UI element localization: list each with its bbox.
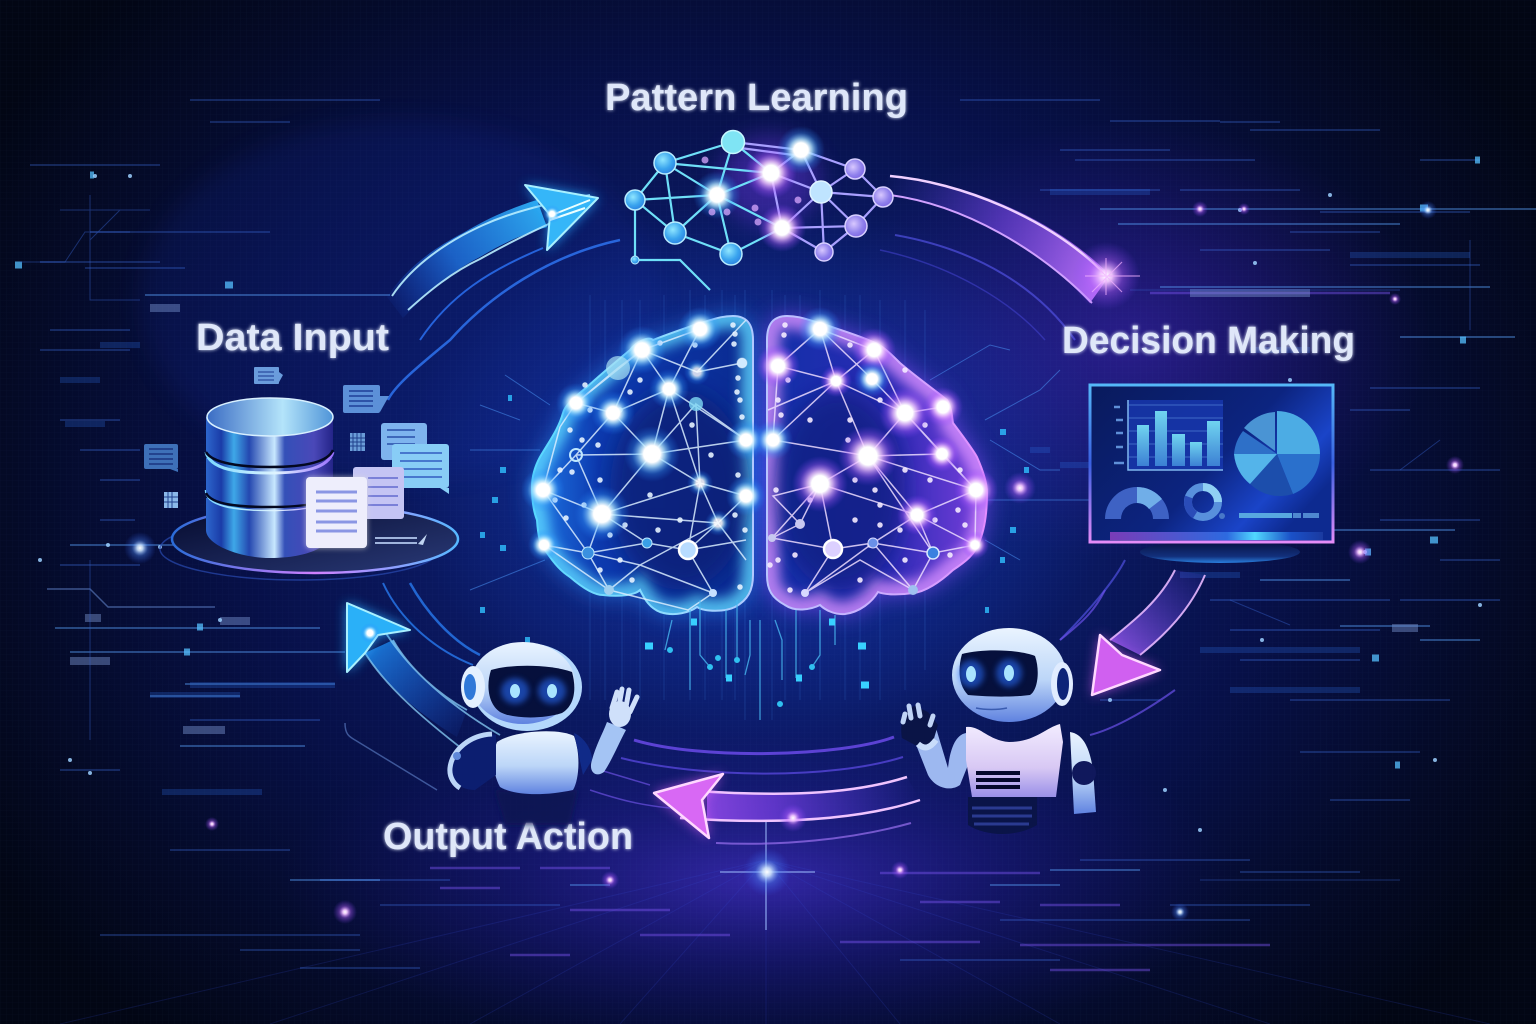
arrow: data input to pattern learning [387,185,598,318]
robot waving arm [574,689,637,775]
title: output action: Output Action [383,816,633,858]
title: data input: Data Input [196,317,389,359]
gauge [1105,487,1169,519]
platform [160,505,458,580]
right nodes [753,307,998,597]
robot head [461,642,582,731]
bar chart [1114,400,1223,470]
floating documents and bubbles [144,367,449,548]
left dots [555,325,745,587]
arrow: output action loop [590,737,920,844]
database cylinder [206,398,333,558]
robot body [494,731,578,794]
arrow: pattern learning to decision making [885,175,1140,310]
title: pattern learning: Pattern Learning [605,77,908,119]
brain glow [532,316,987,614]
background glow sparks [124,201,1464,924]
robot eyes [501,678,566,704]
robot left arm [450,734,496,790]
left network links [635,142,782,290]
robot: decision output right [901,628,1096,834]
left nodes [521,307,766,597]
dashboard screen [1090,385,1333,542]
robot lower torso [968,797,1037,834]
title: decision making: Decision Making [1062,320,1355,362]
right synapse links [768,329,976,593]
arrow: output action to data input [347,603,500,770]
right hemisphere [753,307,998,614]
right dots [770,325,965,590]
decision making: dashboard [1090,385,1333,563]
robot eyes [958,659,1022,688]
orbit rings [383,235,1125,665]
dashboard stand [1140,541,1300,563]
robot left arm and hand [901,705,970,788]
robot right arm [1070,732,1096,814]
left hemisphere [521,307,766,614]
dashboard status bars [1110,513,1323,540]
right network links [733,142,883,252]
pie chart [1234,411,1320,496]
robot head [952,628,1073,722]
pattern learning neural network [625,126,893,290]
data input: database and documents [144,367,458,580]
arrow: decision making to output action [1060,570,1205,735]
brain circuit traces [645,600,869,720]
robot chest [966,724,1063,797]
left synapse links [543,320,746,610]
central brain [521,307,998,614]
network nodes [625,126,893,265]
robot: output action left [450,642,637,825]
donut chart [1188,487,1225,519]
